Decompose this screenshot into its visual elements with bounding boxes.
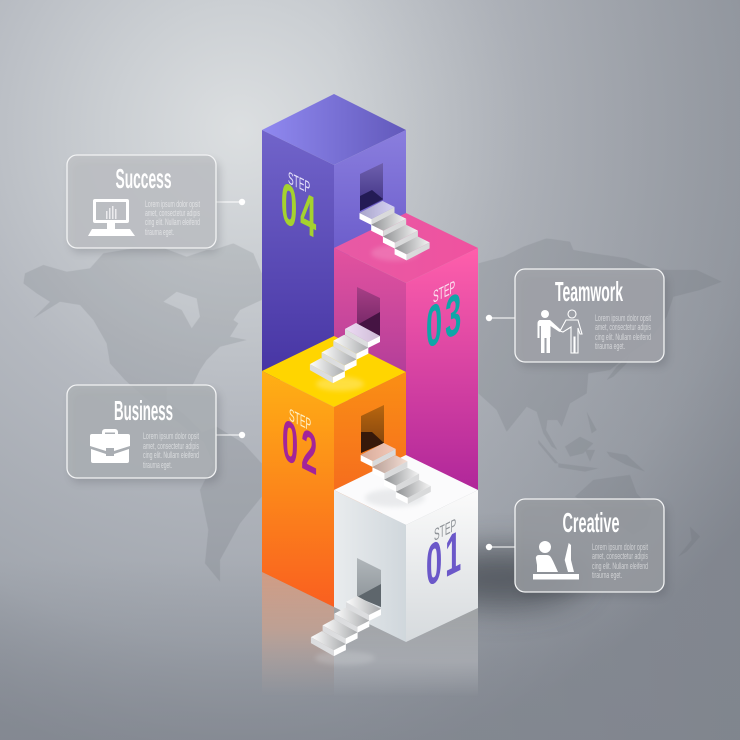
- panel: success: [67, 155, 245, 253]
- panel box: [67, 155, 216, 248]
- connector: [216, 432, 245, 438]
- panel box: [515, 269, 664, 362]
- map: new guinea: [607, 452, 645, 472]
- label: step 02: 02: [282, 405, 320, 489]
- pink right face: [406, 248, 478, 490]
- body text: cing elit. Nullam eleifend: [592, 561, 648, 571]
- block: step 02 orange: [262, 336, 406, 607]
- block: step 03 pink: [334, 213, 478, 490]
- map: americas: [23, 243, 262, 582]
- body text: amet, consectetur adipis: [592, 551, 648, 561]
- panel: teamwork: [486, 269, 668, 367]
- stairs 01 to floor: [311, 596, 381, 665]
- pink left face: [334, 248, 406, 400]
- body text: Lorem ipsum dolor opsit: [595, 313, 651, 323]
- panel shadow: [70, 160, 220, 253]
- label: step 04: STEP: [288, 168, 310, 198]
- icon: computer: [88, 199, 135, 236]
- door 04: [360, 163, 383, 211]
- body text: [145, 199, 200, 237]
- reflection: white block: [334, 607, 478, 697]
- connector: [216, 199, 245, 205]
- body text: tiraurna eget.: [592, 570, 622, 580]
- map: japan: [607, 353, 630, 380]
- panel: business: Business: [114, 395, 173, 426]
- floor reflections: [262, 572, 478, 697]
- icon: handshake: [537, 310, 582, 353]
- body text: cing elit. Nullam eleifend: [595, 332, 651, 342]
- map: sulawesi: [585, 450, 595, 462]
- map: new zealand: [678, 527, 700, 557]
- body text: amet, consectetur adipis: [595, 322, 651, 332]
- orange left face: [262, 371, 334, 607]
- orange right face: [334, 372, 406, 540]
- connector: [486, 544, 515, 550]
- heading: Teamwork: [555, 276, 623, 307]
- panel box: [67, 385, 216, 478]
- stair shadow: [315, 651, 375, 665]
- door 01: [357, 558, 381, 607]
- purple left face: [262, 130, 334, 380]
- body text: [595, 313, 651, 351]
- map: australia: [575, 475, 652, 535]
- white left face: [334, 490, 406, 642]
- label: step 01: 01: [426, 515, 464, 599]
- background bottom shade: [0, 560, 740, 740]
- body text: tiraurna eget.: [595, 341, 625, 351]
- icon: person at computer: [533, 541, 579, 580]
- panel: business: [67, 385, 245, 483]
- body text: Lorem ipsum dolor opsit: [145, 199, 200, 209]
- map: eurasia: [478, 238, 722, 450]
- white top: [334, 455, 478, 525]
- label: step 01: STEP: [434, 515, 456, 545]
- stairs 04 to 03: [360, 201, 430, 261]
- map: java: [558, 463, 598, 472]
- door 02: [361, 405, 384, 453]
- yellow top: [262, 336, 406, 407]
- world map: [23, 238, 722, 582]
- stair shadow: [316, 377, 364, 391]
- reflection: orange block: [262, 572, 334, 697]
- panel shadow: [518, 504, 668, 597]
- label: step 04: 04: [281, 168, 319, 252]
- pink top: [334, 213, 478, 283]
- stairs 02 to 01: [361, 443, 431, 507]
- body text: amet, consectetur adipis: [143, 441, 199, 451]
- stair shadow: [371, 245, 419, 261]
- panel box: [515, 499, 664, 592]
- body text: amet, consectetur adipis: [145, 208, 200, 218]
- icon: briefcase: [90, 429, 130, 463]
- stair shadow: [365, 489, 425, 507]
- panel: success: Success: [116, 163, 172, 194]
- connector: [486, 315, 515, 321]
- body text: tiraurna eget.: [143, 460, 172, 470]
- body text: cing elit. Nullam eleifend: [143, 450, 199, 460]
- block: step 04 purple: [262, 94, 406, 380]
- body text: Lorem ipsum dolor opsit: [143, 431, 199, 441]
- label: step 02: STEP: [289, 405, 311, 435]
- block: step 01 white: [334, 455, 478, 642]
- tower shadow: [415, 548, 585, 608]
- body text: Lorem ipsum dolor opsit: [592, 542, 648, 552]
- white right face: [406, 490, 478, 642]
- heading: Creative: [562, 507, 620, 538]
- panel shadow: [70, 390, 220, 483]
- stairs 03 to 02: [310, 323, 380, 391]
- body text: cing elit. Nullam eleifend: [145, 217, 200, 227]
- map: asia and oceania: [478, 238, 722, 557]
- map: borneo: [565, 437, 593, 457]
- body text: [592, 542, 648, 580]
- body text: [143, 431, 199, 470]
- label: step 03: STEP: [433, 277, 455, 307]
- door 03: [357, 287, 380, 337]
- panel: creative: [486, 499, 668, 597]
- label: step 03: 03: [426, 277, 464, 361]
- map: south america: [200, 427, 262, 582]
- map: sumatra: [538, 440, 558, 463]
- map: philippines: [587, 412, 597, 433]
- body text: tiraurna eget.: [145, 227, 174, 237]
- panel shadow: [518, 274, 668, 367]
- purple top: [262, 94, 406, 165]
- purple right face: [334, 130, 406, 260]
